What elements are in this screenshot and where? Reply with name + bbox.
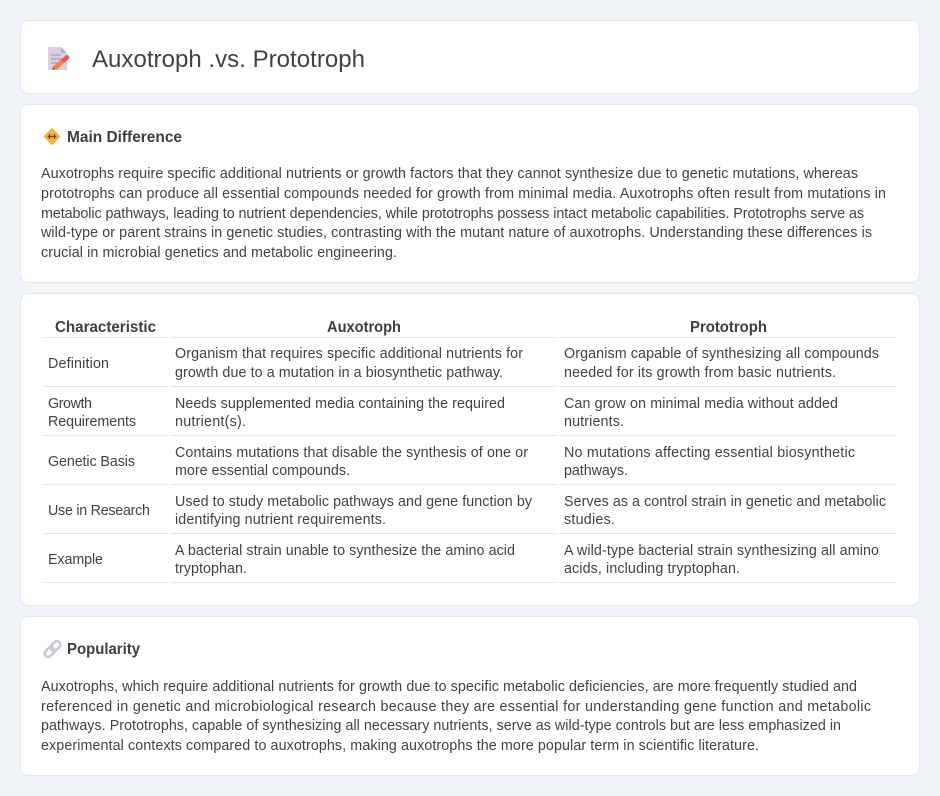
row: definition: Organism that requires specific additional nutrients for: [175, 346, 523, 362]
table header: Prototroph: [690, 319, 767, 336]
text block: main difference paragraph: Auxotrophs require specific additional nutrients or growth factors that they cannot synthesize due to genetic mutations, whereas: [41, 166, 858, 182]
panel: main difference: [20, 104, 920, 282]
row: growth requirements: nutrients.: [564, 414, 624, 430]
row: genetic basis: No mutations affecting essential biosynthetic: [564, 445, 855, 461]
row: example: Example: [48, 552, 103, 568]
row: growth requirements: Requirements: [48, 414, 136, 430]
text block: main difference paragraph: metabolic pathways, leading to nutrient dependencies, while prototrophs possess intact metabolic capabilities. Prototrophs serve as: [41, 206, 864, 222]
heading: main difference: Main Difference: [67, 129, 182, 146]
row: definition: Definition: [48, 356, 109, 372]
text block: popularity paragraph: pathways. Prototrophs, capable of synthesizing all necessary nutrients, serve as wild-type controls but are less emphasized in: [41, 718, 841, 734]
text block: popularity paragraph: Auxotrophs, which require additional nutrients for growth due to specific metabolic deficiencies, are more frequently studied and: [41, 679, 857, 695]
row: use in research: Used to study metabolic pathways and gene function by: [175, 494, 533, 510]
row: growth requirements: Can grow on minimal media without added: [564, 396, 838, 412]
text block: main difference paragraph: crucial in microbial genetics and metabolic engineering.: [41, 245, 397, 261]
row: use in research: Serves as a control strain in genetic and metabolic: [564, 494, 886, 510]
row: example: A bacterial strain unable to synthesize the amino acid: [175, 543, 515, 559]
row: definition: growth due to a mutation in a biosynthetic pathway.: [175, 365, 503, 381]
row: use in research: studies.: [564, 512, 615, 528]
row: genetic basis: pathways.: [564, 463, 628, 479]
row: definition: Organism capable of synthesizing all compounds: [564, 346, 879, 362]
text block: main difference paragraph: prototrophs can produce all essential compounds needed for growth from minimal media. Auxotrophs often result from mutations in: [41, 186, 886, 202]
text block: popularity paragraph: experimental contexts compared to auxotrophs, making auxotrophs the more popular term in scientific literature.: [41, 738, 759, 754]
text block: main difference paragraph: wild-type or parent strains in genetic studies, contrasting with the mutant nature of auxotrophs. Understanding these differences is: [40, 225, 872, 241]
panel: popularity: [20, 616, 920, 776]
text block: popularity paragraph: [41, 679, 871, 754]
row: growth requirements: nutrient(s).: [175, 414, 246, 430]
row: use in research: Use in Research: [48, 503, 150, 519]
table rule lines: [43, 338, 897, 582]
row: definition: needed for its growth from basic nutrients.: [564, 365, 836, 381]
row: example: acids, including tryptophan.: [564, 561, 740, 577]
table header: Auxotroph: [327, 319, 401, 336]
text block: main difference paragraph: [40, 166, 886, 261]
panel: title card: [20, 20, 920, 94]
row: growth requirements: Needs supplemented media containing the required: [175, 396, 505, 412]
icon: memo with pencil: [48, 47, 67, 70]
row: definition: [48, 346, 879, 381]
row: growth requirements: Growth: [48, 396, 92, 412]
row: use in research: [48, 494, 886, 528]
row: example: tryptophan.: [175, 561, 247, 577]
row: growth requirements: [48, 396, 838, 430]
row: genetic basis: Genetic Basis: [48, 454, 135, 470]
row: use in research: identifying nutrient requirements.: [175, 512, 386, 528]
row: example: [48, 543, 879, 577]
text block: popularity paragraph: referenced in genetic and microbiological research because they are essential for understanding gene function and metabolic: [41, 699, 871, 715]
table header: Characteristic: [55, 319, 156, 336]
icon: warning diamond: [44, 128, 60, 144]
heading: popularity: Popularity: [67, 641, 140, 658]
row: genetic basis: more essential compounds.: [175, 463, 350, 479]
title: Auxotroph .vs. Prototroph: [92, 46, 365, 73]
row: example: A wild-type bacterial strain synthesizing all amino: [564, 543, 879, 559]
row: genetic basis: Contains mutations that disable the synthesis of one or: [175, 445, 528, 461]
table header: [55, 319, 767, 336]
panel: comparison table: [20, 294, 920, 606]
row: genetic basis: [48, 445, 855, 479]
icon: link: [43, 640, 62, 658]
